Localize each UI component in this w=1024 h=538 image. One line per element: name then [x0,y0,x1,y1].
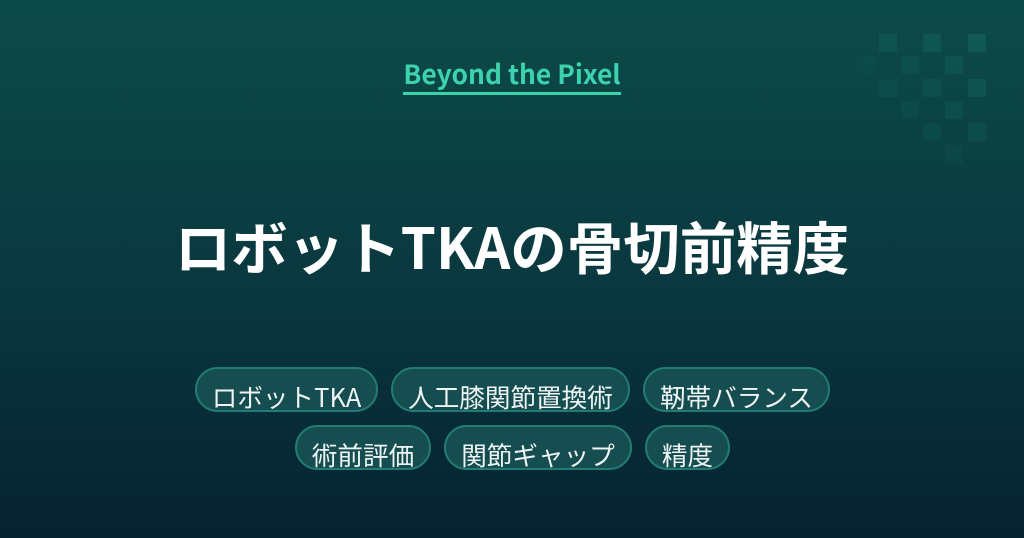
tag: 人工膝関節置換術 [391,367,630,412]
tag: 靭帯バランス [643,367,830,412]
tag: 術前評価: 術前評価 [312,436,414,473]
tag: 精度 [645,425,730,470]
keyword tags [195,367,830,473]
tag: ロボットTKA: ロボットTKA [212,378,361,415]
brand label: Beyond the Pixel: Beyond the Pixel [403,53,621,92]
tag: 精度: 精度 [662,436,713,473]
tag: 術前評価 [295,425,431,470]
tag: 関節ギャップ: 関節ギャップ [461,436,615,473]
decorative pixel grid icon [879,34,986,141]
tag: 関節ギャップ [444,425,632,470]
tag: 靭帯バランス: 靭帯バランス [660,378,813,415]
tag: 人工膝関節置換術: 人工膝関節置換術 [408,378,613,415]
tag: ロボットTKA [195,367,378,412]
title: ロボットTKAの骨切前精度 [175,204,849,286]
